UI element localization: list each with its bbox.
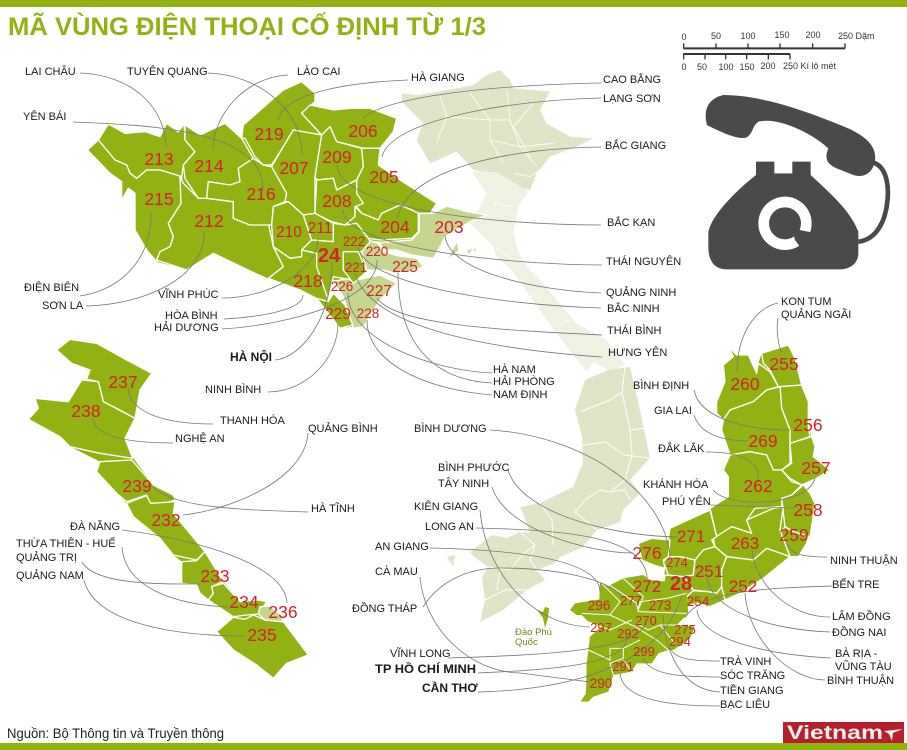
label: TRÀ VINH: TRÀ VINH bbox=[720, 655, 771, 668]
label: KON TUM: KON TUM bbox=[781, 296, 832, 308]
background map: pale Vietnam bbox=[402, 70, 650, 622]
area codes: 218 bbox=[293, 271, 323, 291]
area codes: 232 bbox=[151, 510, 181, 530]
label: QUẢNG NAM: QUẢNG NAM bbox=[16, 569, 84, 582]
area codes: 207 bbox=[279, 158, 309, 178]
area codes: 276 bbox=[632, 543, 662, 563]
label: QUẢNG NAM bbox=[16, 569, 245, 636]
area codes: 271 bbox=[677, 527, 705, 546]
scale bar: 250 Kí lô mét bbox=[783, 61, 837, 71]
label: QUẢNG TRỊ: QUẢNG TRỊ bbox=[16, 551, 77, 564]
area codes: 297 bbox=[590, 620, 612, 635]
label: LÂM ĐỒNG: LÂM ĐỒNG bbox=[832, 610, 891, 623]
label: HÀ GIANG bbox=[278, 71, 465, 120]
label: SƠN LA: SƠN LA bbox=[42, 300, 84, 312]
area codes: 262 bbox=[743, 476, 773, 496]
label: NAM ĐỊNH: NAM ĐỊNH bbox=[493, 389, 547, 401]
area codes: 270 bbox=[635, 613, 657, 628]
map panel: northern provinces bbox=[87, 82, 487, 328]
label: HẢI DƯƠNG bbox=[154, 260, 377, 334]
label: GIA LAI bbox=[654, 405, 748, 441]
area codes: 257 bbox=[801, 458, 831, 478]
label: HƯNG YÊN: HƯNG YÊN bbox=[608, 346, 667, 359]
area codes: 255 bbox=[769, 354, 799, 374]
area codes: 208 bbox=[322, 191, 352, 211]
area codes: 260 bbox=[730, 374, 760, 394]
area codes: 206 bbox=[348, 121, 378, 141]
area codes: 274 bbox=[666, 555, 688, 570]
area codes: 209 bbox=[322, 147, 352, 167]
area codes: 272 bbox=[633, 577, 661, 596]
label: THỪA THIÊN - HUẾ bbox=[16, 537, 228, 607]
label: Đảo Phú Quốc: Đảo Phú bbox=[515, 627, 552, 638]
label: LÀO CAI bbox=[213, 65, 340, 150]
label: YÊN BÁI: YÊN BÁI bbox=[23, 110, 66, 123]
label: QUẢNG NGÃI: QUẢNG NGÃI bbox=[781, 308, 851, 321]
area codes: 204 bbox=[380, 217, 410, 237]
icon: telephone bbox=[706, 95, 888, 269]
label: THỪA THIÊN - HUẾ: THỪA THIÊN - HUẾ bbox=[16, 537, 116, 550]
label: HÒA BÌNH bbox=[165, 295, 303, 322]
pale delta and Quảng Ninh provinces bbox=[333, 206, 487, 328]
icon: Phú Quốc island bbox=[537, 607, 549, 628]
label: NINH BÌNH: NINH BÌNH bbox=[205, 383, 261, 396]
area codes: 213 bbox=[144, 149, 174, 169]
label: TÂY NINH: TÂY NINH bbox=[438, 477, 489, 490]
label: THÁI BÌNH bbox=[377, 298, 661, 337]
label: HÀ NỘI: HÀ NỘI bbox=[230, 349, 272, 364]
label: KIÊN GIANG bbox=[414, 500, 590, 627]
label: QUẢNG NGÃI bbox=[777, 308, 851, 353]
scale bar: 150 bbox=[739, 62, 755, 72]
label: BÀ RỊA - VŨNG TÀU: BÀ RỊA - bbox=[835, 647, 878, 660]
source note: Nguồn: Bộ Thông tin và Truyền thông bbox=[7, 726, 224, 741]
area codes: 237 bbox=[108, 372, 138, 392]
label: SƠN LA bbox=[42, 232, 204, 312]
area codes: 225 bbox=[392, 259, 418, 276]
label: HÒA BÌNH: HÒA BÌNH bbox=[165, 309, 218, 322]
label: HÀ GIANG: HÀ GIANG bbox=[411, 71, 465, 84]
area codes: 214 bbox=[194, 156, 224, 176]
top bar bbox=[0, 0, 907, 7]
label: LONG AN bbox=[425, 521, 647, 578]
scale bar: 0 bbox=[681, 62, 687, 72]
label: PHÚ YÊN bbox=[662, 495, 793, 508]
label: HẢI PHÒNG bbox=[398, 273, 555, 388]
area codes: 24 bbox=[318, 245, 341, 267]
label: ĐÀ NẴNG bbox=[70, 520, 287, 603]
label: AN GIANG: AN GIANG bbox=[375, 541, 429, 553]
label: ĐỒNG THÁP: ĐỒNG THÁP bbox=[352, 602, 417, 615]
label: BÌNH ĐỊNH bbox=[633, 379, 790, 430]
map panel: central highlands and southeast provinces bbox=[638, 345, 830, 607]
label: LÀO CAI: LÀO CAI bbox=[297, 65, 340, 78]
area codes: 277 bbox=[620, 593, 642, 608]
area codes: 254 bbox=[687, 594, 710, 609]
label: VĨNH LONG: VĨNH LONG bbox=[390, 647, 451, 660]
area codes: 292 bbox=[617, 626, 639, 641]
label: BẠC LIÊU: BẠC LIÊU bbox=[720, 698, 770, 711]
area codes: 216 bbox=[246, 184, 276, 204]
area codes: 211 bbox=[308, 220, 332, 237]
area codes: 259 bbox=[779, 525, 809, 545]
label: BẾN TRE: BẾN TRE bbox=[832, 578, 879, 591]
area codes: 233 bbox=[200, 566, 230, 586]
label: QUẢNG NINH: QUẢNG NINH bbox=[606, 286, 676, 299]
scale bar: 50 bbox=[697, 62, 707, 72]
label: CÀ MAU bbox=[375, 565, 590, 682]
area codes: 227 bbox=[366, 283, 392, 300]
label: HÀ NAM bbox=[348, 293, 536, 376]
area codes: 263 bbox=[731, 534, 759, 553]
label: TRÀ VINH bbox=[670, 648, 771, 668]
area codes: 205 bbox=[369, 167, 399, 187]
scale bar: 200 bbox=[760, 61, 776, 71]
area codes: 273 bbox=[649, 598, 671, 613]
label: GIA LAI: GIA LAI bbox=[654, 405, 692, 417]
label: BẠC LIÊU bbox=[620, 673, 770, 711]
label: QUẢNG TRỊ bbox=[16, 551, 200, 584]
label: BẮC NINH: BẮC NINH bbox=[607, 302, 660, 315]
label: TUYÊN QUANG: TUYÊN QUANG bbox=[127, 65, 208, 78]
map panel: Mekong delta provinces bbox=[570, 575, 695, 702]
label: HÀ TĨNH: HÀ TĨNH bbox=[311, 502, 355, 515]
label: Quốc: Quốc bbox=[515, 637, 538, 648]
scale bar: 200 bbox=[805, 30, 821, 40]
area codes: 290 bbox=[590, 676, 612, 691]
label: BÀ RỊA - VŨNG TÀU bbox=[697, 610, 892, 673]
scale bar: 250 Dặm bbox=[838, 31, 875, 41]
label: BẮC KẠN: BẮC KẠN bbox=[607, 216, 655, 229]
scale bar: 100 bbox=[718, 62, 734, 72]
label: CAO BẰNG bbox=[363, 73, 661, 118]
label: THÁI BÌNH: THÁI BÌNH bbox=[607, 324, 661, 337]
label: VĨNH PHÚC bbox=[158, 238, 318, 301]
area codes: 269 bbox=[748, 431, 778, 451]
label: SÓC TRĂNG: SÓC TRĂNG bbox=[720, 669, 785, 682]
label: BẮC GIANG: BẮC GIANG bbox=[605, 139, 666, 152]
label: CẦN THƠ bbox=[422, 595, 682, 695]
label: TIỀN GIANG: TIỀN GIANG bbox=[720, 684, 784, 697]
label: CÀ MAU: CÀ MAU bbox=[375, 565, 418, 578]
area codes: 228 bbox=[357, 306, 379, 321]
area codes: 203 bbox=[434, 217, 464, 237]
label: QUẢNG BÌNH bbox=[183, 422, 378, 515]
label: HÀ NỘI bbox=[230, 262, 332, 364]
area codes: 275 bbox=[674, 622, 696, 637]
area codes: 221 bbox=[345, 260, 367, 275]
label: BÌNH THUẬN bbox=[745, 593, 894, 687]
label: KHÁNH HÒA bbox=[643, 478, 815, 502]
area codes: 258 bbox=[793, 500, 823, 520]
label: BẮC GIANG bbox=[397, 139, 666, 218]
label: VĨNH PHÚC: VĨNH PHÚC bbox=[158, 288, 219, 301]
label: ĐÀ NẴNG: ĐÀ NẴNG bbox=[70, 520, 120, 533]
area codes: 296 bbox=[588, 598, 610, 613]
area codes: 210 bbox=[276, 224, 302, 241]
label: AN GIANG bbox=[375, 541, 600, 592]
area codes: 299 bbox=[633, 644, 655, 659]
label: NGHỆ AN: NGHỆ AN bbox=[175, 432, 225, 445]
label: HƯNG YÊN bbox=[355, 273, 667, 359]
label: KON TUM bbox=[737, 296, 832, 372]
label: KHÁNH HÒA: KHÁNH HÒA bbox=[643, 478, 709, 491]
scale bar: 50 bbox=[711, 31, 721, 41]
label: VĨNH LONG bbox=[390, 623, 645, 660]
label: BẮC KẠN bbox=[337, 165, 655, 229]
label: NINH BÌNH bbox=[205, 323, 338, 396]
label: LẠNG SƠN: LẠNG SƠN bbox=[603, 93, 661, 105]
label: BẾN TRE bbox=[685, 578, 879, 618]
area codes: 222 bbox=[343, 234, 365, 249]
label: NINH THUẬN: NINH THUẬN bbox=[830, 554, 898, 567]
label: NAM ĐỊNH bbox=[367, 320, 547, 401]
area codes: 212 bbox=[194, 211, 224, 231]
label: NGHỆ AN bbox=[93, 418, 225, 445]
area codes: 234 bbox=[229, 592, 259, 612]
label: ĐỒNG THÁP bbox=[352, 568, 622, 615]
scale bar: 100 bbox=[740, 31, 756, 41]
label: QUẢNG BÌNH: QUẢNG BÌNH bbox=[308, 422, 378, 435]
area codes: 215 bbox=[144, 189, 174, 209]
label: HẢI DƯƠNG: HẢI DƯƠNG bbox=[154, 321, 219, 334]
label: NINH THUẬN bbox=[787, 543, 898, 567]
label: BÌNH ĐỊNH: BÌNH ĐỊNH bbox=[633, 379, 689, 392]
area codes: 220 bbox=[366, 244, 388, 259]
area codes: 28 bbox=[670, 573, 692, 595]
label: HÀ TĨNH bbox=[153, 487, 355, 515]
area codes: 291 bbox=[612, 659, 634, 674]
label: HẢI PHÒNG: HẢI PHÒNG bbox=[493, 375, 555, 388]
label: CẦN THƠ: CẦN THƠ bbox=[422, 680, 478, 695]
label: ĐẮK LẮK: ĐẮK LẮK bbox=[658, 442, 705, 455]
area codes: 251 bbox=[695, 562, 723, 581]
label: ĐIỆN BIÊN: ĐIỆN BIÊN bbox=[24, 281, 79, 294]
label: TP HỒ CHÍ MINH: TP HỒ CHÍ MINH bbox=[375, 661, 476, 676]
label: BÌNH THUẬN: BÌNH THUẬN bbox=[827, 674, 894, 687]
label: LAI CHÂU: LAI CHÂU bbox=[25, 65, 76, 78]
label: BẮC NINH bbox=[358, 247, 660, 315]
label: THANH HÓA: THANH HÓA bbox=[220, 414, 285, 427]
label: BÌNH PHƯỚC bbox=[438, 461, 677, 537]
label: THANH HÓA bbox=[128, 388, 285, 427]
area codes: 256 bbox=[793, 415, 823, 435]
label: SÓC TRĂNG bbox=[643, 658, 785, 682]
label: HÀ NAM: HÀ NAM bbox=[493, 363, 536, 376]
label: TIỀN GIANG bbox=[663, 615, 784, 697]
label: LÂM ĐỒNG bbox=[752, 550, 891, 623]
label: LAI CHÂU bbox=[25, 65, 166, 147]
area codes: 226 bbox=[331, 279, 353, 294]
label: BÌNH DƯƠNG bbox=[414, 422, 670, 557]
label: ĐỒNG NAI bbox=[707, 577, 886, 639]
label: ĐẮK LẮK bbox=[658, 442, 758, 480]
label: QUẢNG NINH bbox=[445, 235, 676, 299]
label: THÁI NGUYÊN: THÁI NGUYÊN bbox=[606, 255, 681, 268]
label: TUYÊN QUANG bbox=[127, 65, 302, 155]
logo: Vietnam+ bbox=[783, 722, 904, 744]
area codes: 235 bbox=[247, 625, 277, 645]
area codes: 236 bbox=[268, 602, 298, 622]
label: BÀ RỊA - VŨNG TÀU: VŨNG TÀU bbox=[835, 660, 892, 673]
logo: Vietnam+: Vietnam bbox=[787, 723, 883, 744]
label: LẠNG SƠN bbox=[382, 93, 661, 157]
label: PHÚ YÊN: PHÚ YÊN bbox=[662, 495, 711, 508]
area codes: 229 bbox=[325, 306, 351, 323]
label: YÊN BÁI bbox=[23, 110, 263, 190]
label: ĐIỆN BIÊN bbox=[24, 212, 151, 296]
label: ĐỒNG NAI: ĐỒNG NAI bbox=[832, 626, 886, 639]
bottom bar bbox=[0, 743, 907, 750]
label: CAO BẰNG: CAO BẰNG bbox=[603, 73, 661, 86]
label: KIÊN GIANG: KIÊN GIANG bbox=[414, 500, 478, 513]
label: TÂY NINH bbox=[438, 477, 633, 553]
label: LONG AN: LONG AN bbox=[425, 521, 474, 533]
scale bar: 0 bbox=[681, 32, 687, 42]
map panel: north central provinces bbox=[28, 339, 308, 678]
area codes bbox=[71, 121, 831, 691]
area codes: 294 bbox=[669, 634, 691, 649]
area codes: 238 bbox=[71, 401, 101, 421]
label: BÌNH PHƯỚC: BÌNH PHƯỚC bbox=[438, 461, 509, 474]
scale bar bbox=[681, 30, 875, 72]
area codes: 219 bbox=[254, 124, 284, 144]
label: BÌNH DƯƠNG: BÌNH DƯƠNG bbox=[414, 422, 487, 435]
label: TP HỒ CHÍ MINH bbox=[375, 638, 627, 676]
label: THÁI NGUYÊN bbox=[343, 210, 681, 268]
title: MÃ VÙNG ĐIỆN THOẠI CỐ ĐỊNH TỪ 1/3 bbox=[8, 11, 486, 41]
area codes: 252 bbox=[729, 577, 757, 596]
area codes: 239 bbox=[122, 476, 152, 496]
scale bar: 150 bbox=[774, 30, 790, 40]
